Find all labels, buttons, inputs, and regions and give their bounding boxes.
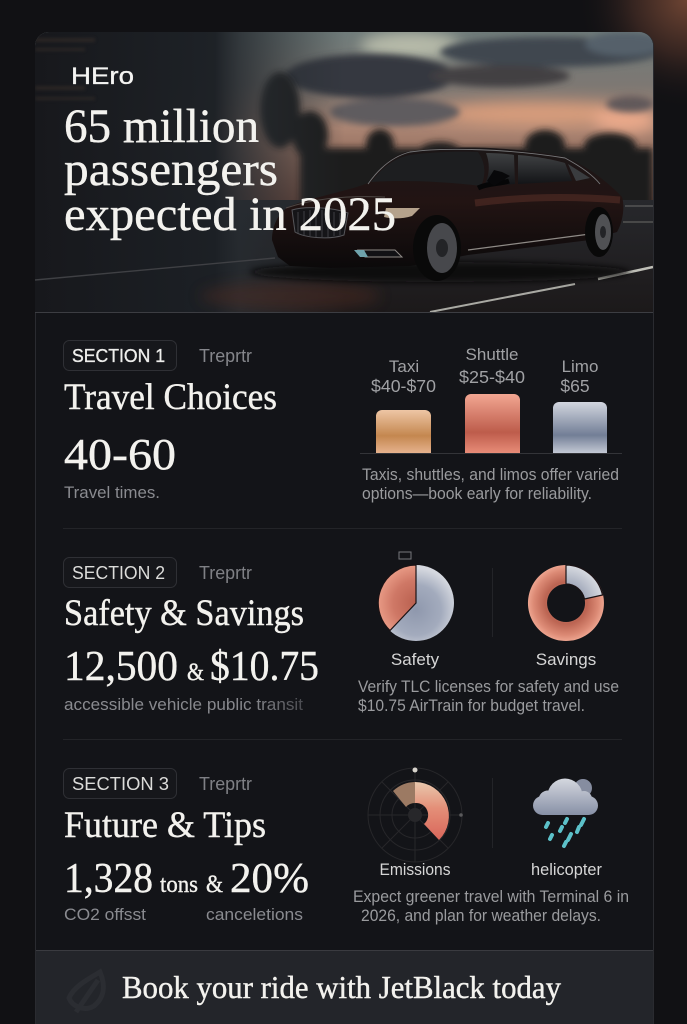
bar: taxi: $40-$70: [371, 376, 436, 396]
section 3 caption: Expect greener travel with Terminal 6 in: [353, 887, 629, 906]
section 3 stat labels: [64, 905, 303, 924]
bar: taxi: Taxi: [389, 357, 419, 376]
section 2 stats: 12,500: [64, 644, 178, 690]
pie chart: safety: [378, 552, 454, 669]
section 3 caption: [353, 887, 629, 925]
section 2 stat label: accessible vehicle public transit: [64, 695, 303, 714]
section 2 caption: $10.75 AirTrain for budget travel.: [358, 696, 585, 715]
section 3 stats: &: [206, 871, 223, 898]
bar: limo: $65: [560, 376, 590, 396]
section 1 caption: Taxis, shuttles, and limos offer varied: [362, 465, 619, 484]
bar: shuttle: $25-$40: [459, 367, 525, 387]
panel: section 3: [64, 768, 629, 925]
hero headline: 65 million: [64, 100, 259, 153]
wheels: [413, 207, 613, 281]
section 2 caption: [358, 677, 619, 715]
hero headline: expected in 2025: [64, 188, 396, 241]
bar chart: fares: [360, 345, 622, 454]
section 1 tag: SECTION 1: [72, 345, 165, 366]
panel: hero: [35, 32, 665, 312]
section 3 heading: Future & Tips: [64, 805, 266, 846]
hero photo: dusk sky and road: [35, 32, 665, 312]
pie chart: safety: Safety: [391, 650, 440, 669]
hero headline: [64, 100, 396, 241]
hero eyebrow: HEro: [71, 63, 134, 90]
hero photo: black limousine: [250, 147, 630, 282]
section 1 stat: 40-60: [64, 430, 176, 479]
section 3 stats: [64, 856, 309, 902]
donut chart: savings: Savings: [536, 650, 596, 669]
icon: rain cloud: [531, 778, 602, 879]
grille and headlight: [292, 208, 420, 257]
section 2 tag: [64, 558, 176, 588]
section 2 tag: SECTION 2: [72, 563, 165, 583]
section 1 stat label: Travel times.: [64, 483, 160, 502]
bar: shuttle: Shuttle: [466, 345, 518, 364]
section 3 tag: [64, 768, 176, 798]
section 2 heading: Safety & Savings: [64, 593, 304, 634]
section 3 tag: SECTION 3: [72, 774, 169, 794]
section 3 stats: 20%: [230, 856, 309, 902]
bar: shuttle: [459, 345, 525, 453]
section 2 stats: &: [187, 659, 204, 686]
panel: section 2: [64, 552, 619, 715]
section 3 stat labels: canceletions: [206, 905, 303, 924]
radar chart: emissions: [368, 768, 463, 879]
hero headline: passengers: [64, 143, 278, 196]
section 3 stat labels: CO2 offsst: [64, 905, 146, 924]
section 1 caption: options—book early for reliability.: [362, 484, 592, 503]
panel: call to action: [36, 950, 653, 1024]
section 1 heading: Travel Choices: [64, 377, 277, 418]
section 1 subtag: Treprtr: [199, 346, 252, 366]
call to action text: Book your ride with JetBlack today: [122, 969, 561, 1005]
section 2 stats: $10.75: [210, 644, 319, 690]
section 2 subtag: Treprtr: [199, 563, 252, 583]
section 2 caption: Verify TLC licenses for safety and use: [358, 677, 619, 696]
section 3 stats: 1,328: [64, 856, 153, 902]
bar: limo: Limo: [562, 357, 598, 376]
icon: rain cloud: helicopter: [531, 860, 602, 879]
radar chart: emissions: Emissions: [380, 860, 450, 879]
icon: faint leaf: [69, 972, 103, 1012]
section 3 caption: 2026, and plan for weather delays.: [361, 906, 601, 925]
section 2 stats: [64, 644, 319, 690]
panel: section 1: [64, 340, 622, 503]
section 1 caption: [362, 465, 619, 503]
bar: limo: [553, 357, 607, 453]
donut chart: savings: [528, 565, 604, 669]
section 1 tag: [64, 340, 176, 370]
section 3 subtag: Treprtr: [199, 774, 252, 794]
section 3 stats: tons: [160, 872, 198, 898]
bar: taxi: [371, 357, 436, 453]
